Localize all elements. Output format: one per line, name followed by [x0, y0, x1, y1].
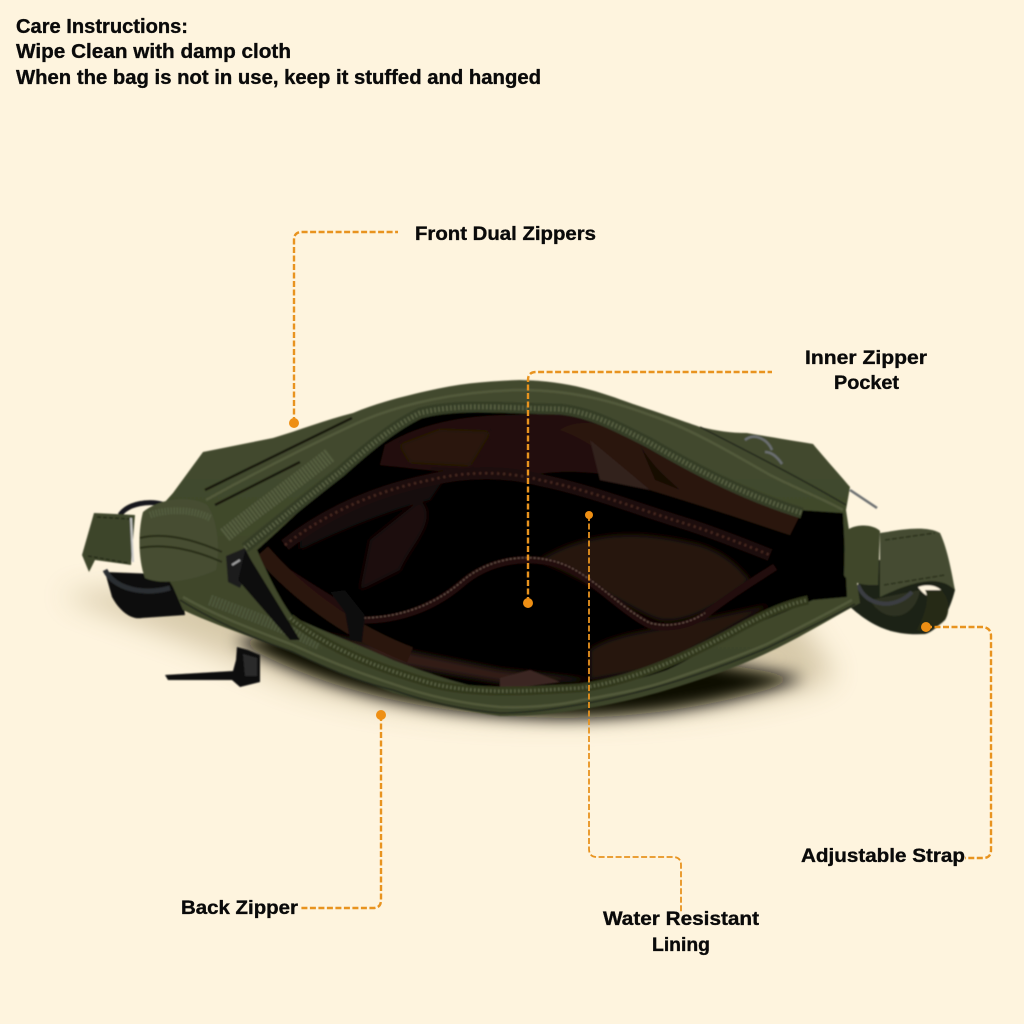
left metal zipper pulls — [165, 548, 300, 687]
callout: adjustable strap — [801, 622, 991, 867]
callout: inner zipper pocket: Pocket — [834, 373, 900, 394]
front flap seam — [205, 418, 352, 505]
care instructions text: Wipe Clean with damp cloth — [16, 40, 291, 63]
upper lining folds — [380, 414, 800, 535]
pocket fabric left — [300, 470, 450, 550]
care instructions text — [16, 15, 541, 89]
mid lining fabric right — [540, 535, 750, 621]
care instructions text: Care Instructions: — [16, 15, 188, 38]
left strap back loop — [105, 503, 185, 618]
callout: front dual zippers — [289, 224, 596, 428]
left strap — [82, 499, 222, 582]
callout: water resistant lining: Lining — [652, 935, 710, 956]
right strap — [844, 525, 955, 631]
callout: back zipper: Back Zipper — [181, 898, 299, 919]
inner lining — [256, 412, 848, 688]
bag body — [140, 380, 860, 716]
callout: water resistant lining — [585, 511, 760, 956]
product photo: shoulder bag seen from above — [82, 380, 955, 716]
inner zippered pocket seams — [285, 473, 770, 555]
callout: back zipper — [181, 710, 386, 919]
ground shadow — [60, 590, 835, 718]
callout: front dual zippers: Front Dual Zippers — [415, 224, 596, 245]
right strap back loop — [848, 560, 955, 634]
callout: adjustable strap: Adjustable Strap — [801, 846, 965, 867]
callout: inner zipper pocket — [523, 348, 928, 608]
hook on top right — [745, 437, 877, 508]
outer rim highlight — [183, 390, 852, 707]
callout: water resistant lining: Water Resistant — [603, 909, 760, 930]
main zipper — [210, 407, 808, 691]
callout: inner zipper pocket: Inner Zipper — [805, 348, 928, 369]
care instructions text: When the bag is not in use, keep it stuffed and hanged — [16, 66, 541, 89]
small inner puller — [330, 590, 365, 642]
